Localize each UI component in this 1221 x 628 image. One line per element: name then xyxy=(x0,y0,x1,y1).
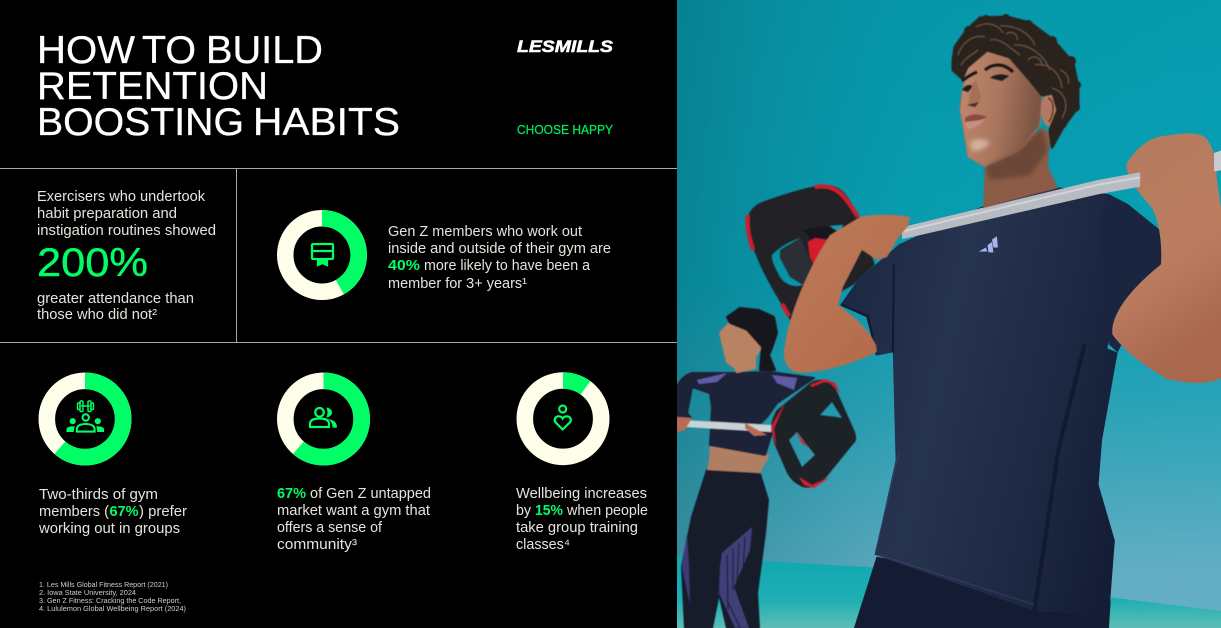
icon: community people xyxy=(310,408,337,428)
stat: 200% attendance: greater attendance than xyxy=(37,291,194,307)
donut chart: community 67% xyxy=(285,381,362,457)
icon: person with heart xyxy=(555,406,571,430)
stat text: Gen Z 40%: 40% xyxy=(388,258,420,274)
stat text: wellbeing: when people xyxy=(566,503,648,519)
woman's head xyxy=(720,308,777,372)
photo: man and woman lifting barbells on teal background xyxy=(677,0,1221,628)
stat text: community: 67% xyxy=(277,486,306,502)
man's shorts xyxy=(854,557,1111,628)
stat text: wellbeing: take group training xyxy=(516,520,638,536)
footnotes: 4. Lululemon Global Wellbeing Report (2024) xyxy=(39,604,186,613)
woman in background xyxy=(677,308,856,628)
stat: 200% attendance: habit preparation and xyxy=(37,206,177,222)
stat: 200% attendance: those who did not² xyxy=(37,307,157,323)
stat: 200% attendance: 200% xyxy=(37,241,148,285)
man's neck xyxy=(983,128,1058,208)
stat text: two-thirds: Two-thirds of gym xyxy=(39,487,158,503)
man's head xyxy=(953,14,1081,180)
donut chart: group preference 67% xyxy=(47,381,123,457)
footnotes: 1. Les Mills Global Fitness Report (2021) xyxy=(39,580,168,589)
stat text: wellbeing xyxy=(516,486,648,553)
stat text: two-thirds: members ( xyxy=(39,504,109,520)
stat text: two-thirds: 67% xyxy=(110,504,139,520)
title xyxy=(37,29,400,144)
title: BUILD xyxy=(206,29,323,72)
panel: infographic text and stats xyxy=(0,29,677,613)
donut chart: wellbeing 15% xyxy=(525,380,601,457)
title: RETENTION xyxy=(37,65,268,108)
stat text: community: of Gen Z untapped xyxy=(310,486,431,502)
man's left arm and hand xyxy=(784,215,910,373)
stat: 200% attendance: Exercisers who undertook xyxy=(37,189,206,205)
woman's barbell plate xyxy=(771,379,856,488)
footnotes: 2. Iowa State University, 2024 xyxy=(39,588,136,597)
stat text: two-thirds xyxy=(38,487,187,537)
stat text: Gen Z 40%: Gen Z members who work out xyxy=(388,224,582,240)
stat text: two-thirds: ) prefer xyxy=(139,504,187,520)
title: BOOSTING xyxy=(37,101,244,144)
logo: Les Mills: LESMILLS xyxy=(517,38,613,56)
title: TO xyxy=(142,29,196,72)
stat text: community xyxy=(277,486,431,553)
title: HABITS xyxy=(253,101,400,144)
stat text: Gen Z 40%: inside and outside of their gym are xyxy=(388,241,611,257)
stat text: Gen Z 40%: more likely to have been a xyxy=(424,258,590,274)
hair xyxy=(953,14,1081,147)
stat text: community: community³ xyxy=(277,537,357,553)
stat text: community: offers a sense of xyxy=(277,520,383,536)
stat text: wellbeing: by xyxy=(516,503,532,519)
woman's leggings xyxy=(682,470,768,628)
donut chart: Gen Z 40% xyxy=(285,218,359,292)
shirt logo xyxy=(979,236,998,252)
stat text: community: market want a gym that xyxy=(277,503,430,519)
footnotes: 3. Gen Z Fitness: Cracking the Code Report, xyxy=(39,596,181,605)
man's barbell plate xyxy=(747,185,875,320)
stat: 200% attendance xyxy=(37,189,216,323)
icon: dumbbell and group xyxy=(66,401,104,432)
woman's torso and top xyxy=(677,372,814,473)
icon: certificate xyxy=(312,244,333,265)
stat text: wellbeing: 15% xyxy=(535,503,563,519)
woman's barbell xyxy=(684,420,771,432)
title: HOW xyxy=(37,29,135,72)
face features xyxy=(962,65,1013,129)
man's shirt xyxy=(841,187,1163,617)
man's right arm and hand xyxy=(1112,133,1221,383)
barbell xyxy=(901,151,1221,239)
stat text: Gen Z 40%: member for 3+ years¹ xyxy=(388,276,527,292)
stat: 200% attendance: instigation routines showed xyxy=(37,223,216,239)
stat text: wellbeing: classes⁴ xyxy=(516,537,570,553)
stat text: two-thirds: working out in groups xyxy=(38,521,180,537)
footnotes xyxy=(39,580,186,613)
stat text: wellbeing: Wellbeing increases xyxy=(516,486,647,502)
woman's hands xyxy=(677,417,767,436)
tagline: CHOOSE HAPPY xyxy=(517,123,614,137)
stat text: Gen Z 40% xyxy=(388,224,611,292)
